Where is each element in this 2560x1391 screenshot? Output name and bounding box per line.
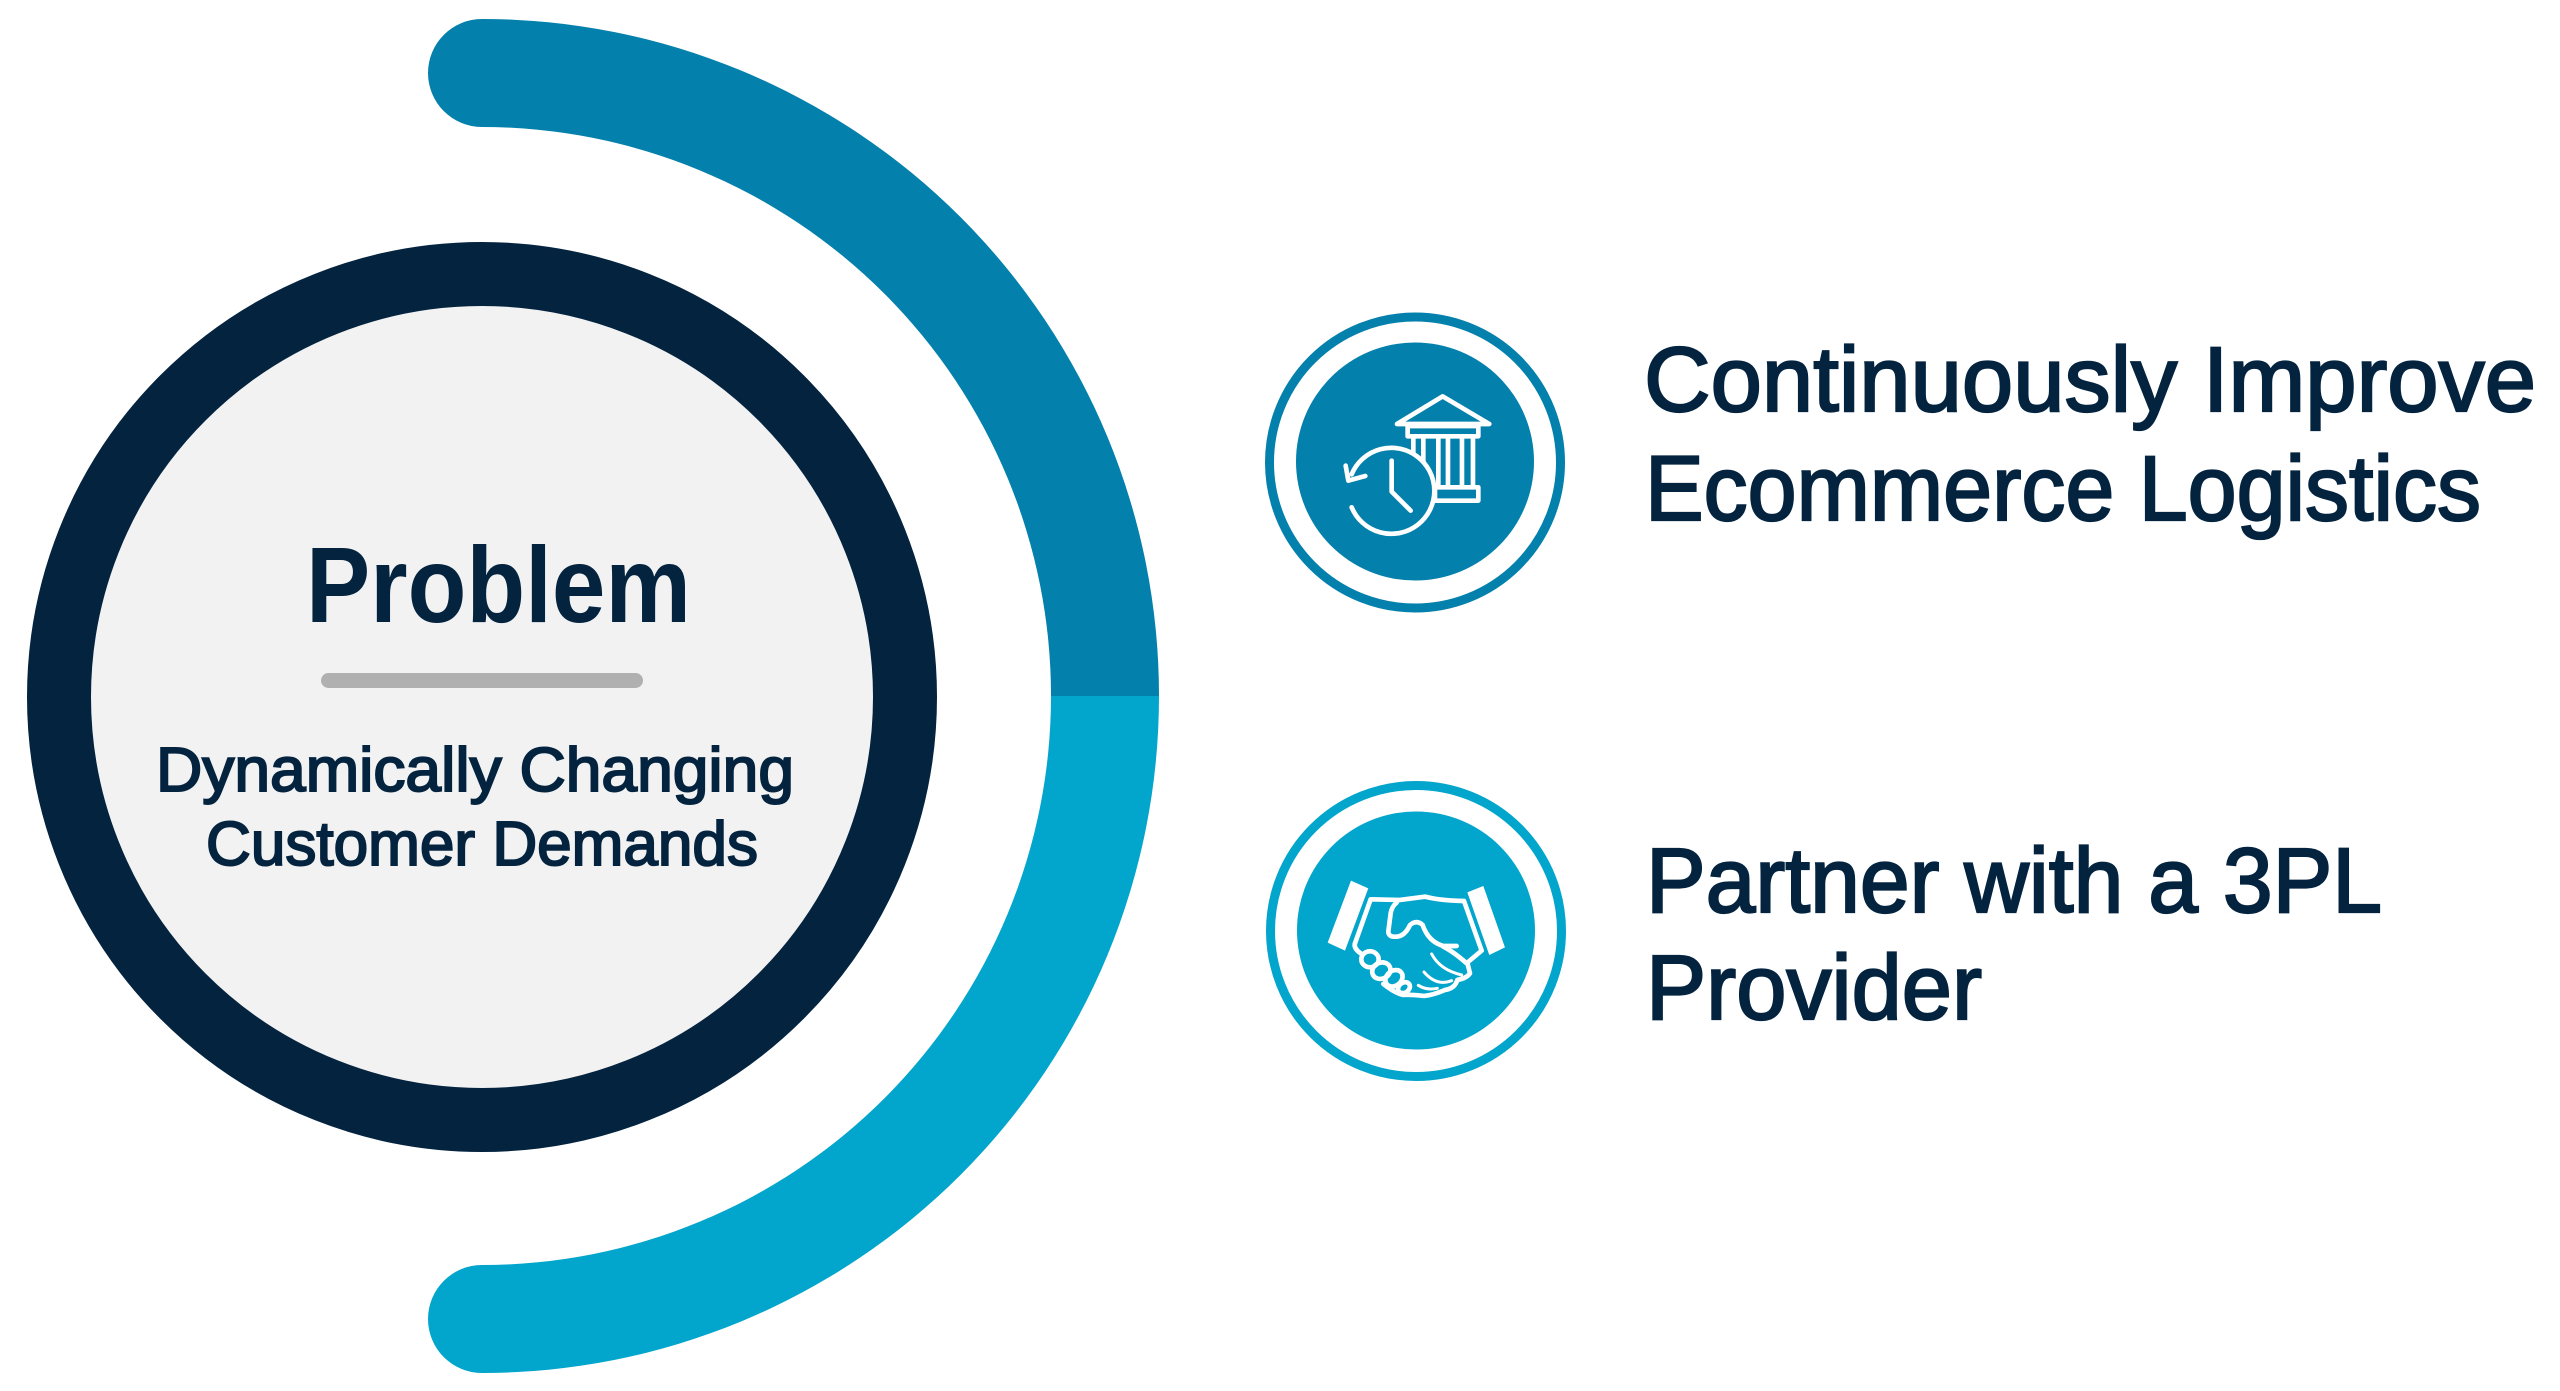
- icon: handshake: [1270, 786, 1562, 1076]
- divider bar: [321, 673, 643, 688]
- lower arc: [428, 696, 1159, 1373]
- upper arc: [428, 19, 1159, 696]
- subtitle: Dynamically Changing: [156, 736, 794, 805]
- subtitle: Customer Demands: [206, 810, 758, 879]
- text: partner with a 3PL provider: [1646, 830, 2382, 1039]
- heading: Problem: Problem: [306, 524, 691, 645]
- circle ring: [59, 274, 905, 1120]
- text: continuously improve: Ecommerce Logistics: [1645, 438, 2481, 540]
- subtitle: [156, 736, 794, 879]
- text: continuously improve: [1644, 329, 2536, 540]
- text: partner with a 3PL provider: Provider: [1646, 937, 1982, 1039]
- text: partner with a 3PL provider: Partner with a 3PL: [1646, 830, 2382, 932]
- panel: problem circle: [59, 274, 905, 1120]
- text: continuously improve: Continuously Improve: [1644, 329, 2536, 431]
- icon: building with clock: [1270, 317, 1560, 608]
